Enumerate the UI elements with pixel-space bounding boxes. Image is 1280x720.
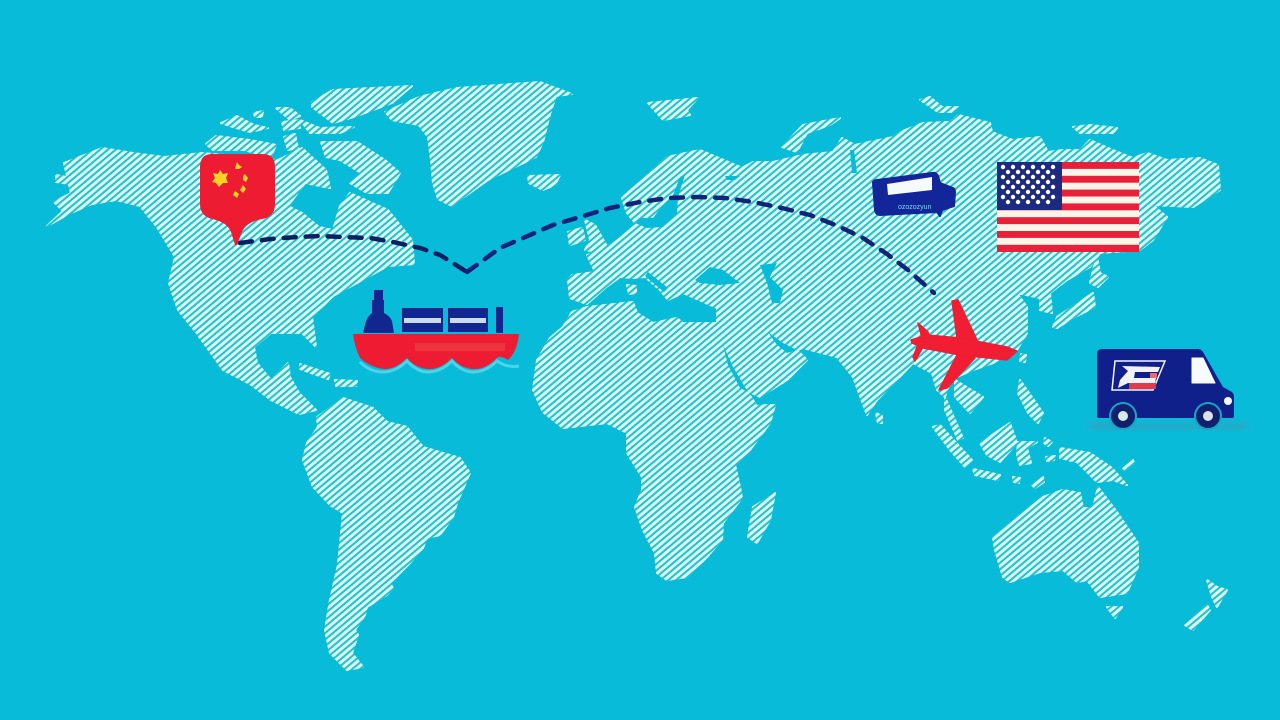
asia islands xyxy=(876,257,1134,488)
plane lower wing xyxy=(939,355,975,390)
inland seas xyxy=(193,150,857,405)
route segment: china pin to ocean xyxy=(240,236,467,272)
caribbean islands xyxy=(300,364,357,386)
south america xyxy=(303,398,470,670)
van window xyxy=(1192,358,1215,383)
icon: cargo ship xyxy=(353,290,519,372)
plane fuselage xyxy=(911,335,1017,360)
ship funnel xyxy=(363,290,394,333)
arctic islands xyxy=(56,86,412,193)
australia xyxy=(993,487,1138,597)
icon: china flag pin xyxy=(200,154,275,245)
arctic russia islands xyxy=(648,97,1117,152)
flag canton xyxy=(997,162,1062,210)
van headlight xyxy=(1224,397,1232,405)
icon: small postal truck xyxy=(873,173,955,216)
iceland xyxy=(528,175,560,190)
plane tail fins xyxy=(913,323,930,361)
china flag stars xyxy=(212,162,248,198)
flag stars xyxy=(1001,165,1055,204)
icon: small postal truck: ozozozyun xyxy=(898,204,932,211)
ship hull xyxy=(353,334,519,369)
icon: delivery van xyxy=(1088,349,1248,430)
icon: red airplane xyxy=(911,300,1017,390)
europe islands xyxy=(568,220,636,294)
van shadow xyxy=(1088,423,1248,429)
new zealand xyxy=(1185,580,1227,630)
tasmania xyxy=(1107,607,1122,618)
icon: usa flag xyxy=(997,162,1139,252)
flag stripes xyxy=(997,162,1139,252)
world map xyxy=(47,82,1227,670)
plane upper wing xyxy=(952,300,977,340)
van logo xyxy=(1112,361,1165,390)
eurasia xyxy=(568,115,1220,415)
route segment: ocean to plane xyxy=(467,197,934,293)
ship waves xyxy=(360,361,519,372)
madagascar xyxy=(748,493,775,543)
van body xyxy=(1097,349,1234,418)
greenland xyxy=(385,82,572,206)
ship containers xyxy=(402,307,503,333)
africa xyxy=(533,302,775,580)
dashed shipping route xyxy=(240,197,934,293)
north america xyxy=(47,148,414,414)
van wheels xyxy=(1109,402,1222,430)
